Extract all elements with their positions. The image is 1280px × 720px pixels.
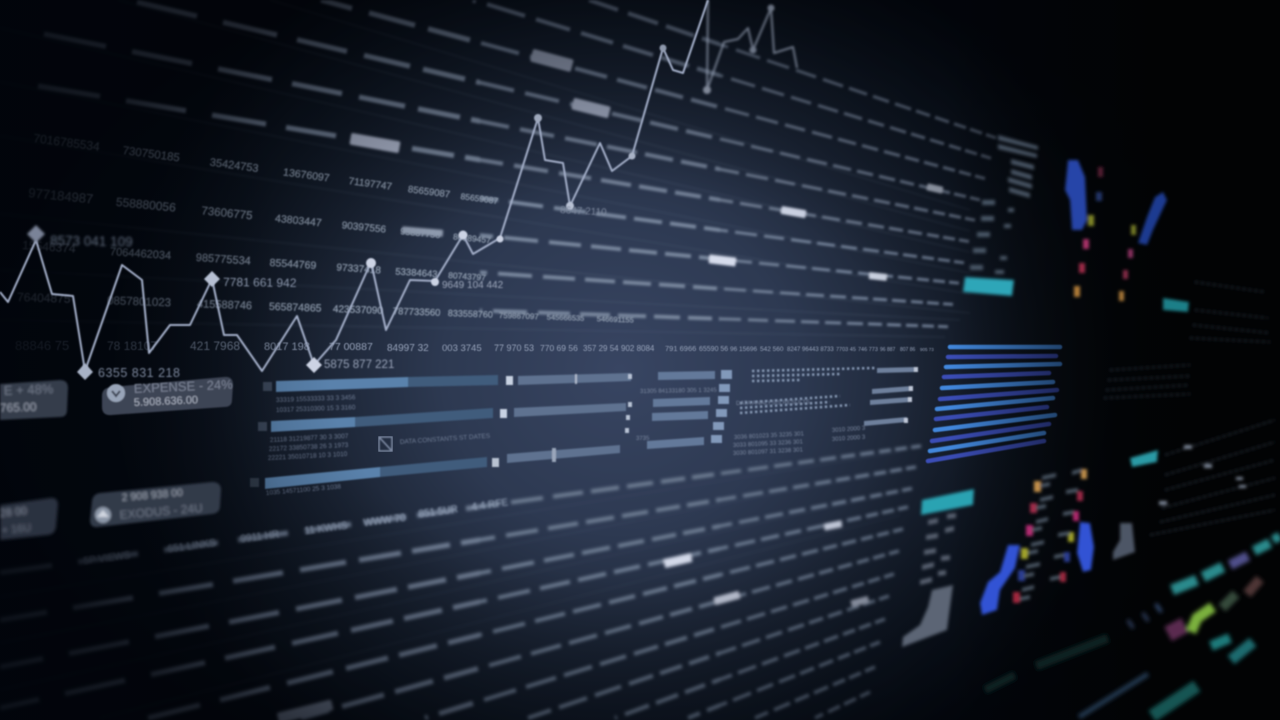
grid lines of lower table <box>0 452 900 718</box>
chart value labels: 6355 831 218 <box>98 366 180 380</box>
middle row of numeric values: 96 15696 <box>730 346 757 353</box>
chart value labels <box>50 205 607 380</box>
middle row of numeric values: 791 6966 <box>665 344 696 353</box>
right small indicator bars <box>864 367 918 426</box>
small text under progress bars: 22221 35010718 10 3 1010 <box>268 451 348 462</box>
data cells, lower rows right <box>718 228 966 330</box>
chart value labels: 8573 041 109 <box>50 233 133 249</box>
callout: lower left: + 16U <box>1 522 32 537</box>
row 977184987: 558880056 <box>115 195 177 215</box>
row 977184987: 977184987 <box>28 185 94 206</box>
small status text in middle panel: 3735 <box>636 436 650 442</box>
lower table header labels: 4 4 RFE <box>471 497 509 513</box>
icon: down chevron circle <box>107 384 125 402</box>
middle row of numeric values: 84997 32 <box>387 343 429 354</box>
row 76404875: 415588746 <box>197 298 252 312</box>
callout: exodus: EXODUS - 24U <box>119 501 203 522</box>
small status text in middle panel: 3010 2000 3 <box>832 426 866 434</box>
lower table header labels <box>83 497 509 567</box>
row 7016785534: 85659087 <box>407 184 451 201</box>
panel: upper data table <box>0 0 1005 337</box>
small text under progress bars <box>266 394 491 497</box>
middle row of numeric values: 421 7968 <box>190 339 240 353</box>
small status text in middle panel: 3030 801097 31 3238 301 <box>733 447 804 457</box>
small text under progress bars: 22172 33850738 26 3 1973 <box>269 442 349 453</box>
row 7064462034: 97337418 <box>336 262 382 276</box>
callout: income partially visible: 765.00 <box>0 400 37 415</box>
panel: blue horizontal bar chart <box>928 347 1060 461</box>
small text under progress bars: DATA CONSTANTS ST DATES <box>400 433 491 446</box>
icon: up arrow house <box>95 507 111 523</box>
callout: lower left <box>0 498 58 540</box>
data cells, lower rows centre <box>478 194 722 322</box>
small status text in middle panel: 3010 2000 3 <box>832 435 866 443</box>
colored blocks bottom right <box>985 536 1280 717</box>
data cells, right section <box>718 442 923 720</box>
progress bar group 3 with square chips <box>625 370 732 449</box>
metric rows above teal tag <box>970 200 1014 274</box>
teal tag <box>963 277 1014 296</box>
row 76404875: 0857801023 <box>107 295 171 309</box>
row 7016785534: 85659087 <box>460 191 499 206</box>
row 977184987: 86589457 <box>453 231 492 245</box>
callout: exodus <box>90 482 221 527</box>
icon: small grid square <box>379 437 392 451</box>
small status text in middle panel <box>636 388 866 457</box>
chart markers <box>27 44 666 380</box>
small status text in middle panel: 3033 801095 33 3236 301 <box>733 439 804 449</box>
middle row of numeric values: 357 29 54 <box>583 344 619 353</box>
row 7064462034: 53384643 <box>395 266 438 280</box>
row 7064462034: 7064462034 <box>110 246 171 262</box>
row 7016785534: 71197747 <box>348 176 393 193</box>
lower table header labels: 5P VIEWS <box>83 550 131 567</box>
row 76404875: 787733560 <box>393 306 441 319</box>
blue gauge right <box>1077 522 1094 572</box>
middle row of numeric values: 770 69 56 <box>540 343 578 353</box>
readable upper table numbers <box>17 131 634 326</box>
row 7016785534: 13676097 <box>282 166 330 185</box>
middle row of numeric values: 65590 56 <box>699 346 728 353</box>
data cells, left section <box>38 0 482 164</box>
row 7064462034: 15546374 <box>22 238 76 256</box>
progress bar group 2 <box>492 373 631 467</box>
row 76404875: 545666535 <box>547 313 584 323</box>
data cells, left section <box>0 502 482 720</box>
middle row of numeric values <box>15 338 934 354</box>
dotted indicator matrix <box>740 368 875 413</box>
panel: lower data table <box>0 446 921 720</box>
data cells, centre section <box>478 471 722 720</box>
row 76404875: 76404875 <box>17 290 71 306</box>
small text under progress bars: 21118 31219877 30 3 3007 <box>270 433 349 444</box>
data cells, centre section <box>478 0 722 204</box>
panel: progress bars and indicators <box>250 367 918 497</box>
panel: expense callouts <box>0 377 233 540</box>
chart value labels: 9649 104 442 <box>442 280 504 291</box>
lower table header labels: 11 KWHS <box>304 520 349 537</box>
metric rows under teal tag <box>920 513 956 585</box>
callout: income partially visible: E + 48% <box>4 381 54 398</box>
grey small stack <box>1113 523 1135 560</box>
lower table header labels: WWW 70 <box>363 513 407 529</box>
dark falloff to the left <box>0 0 280 720</box>
row 977184987: 95887756 <box>400 226 441 240</box>
progress bar group 1 <box>250 375 498 489</box>
panel: upper right dashboard <box>963 135 1270 398</box>
middle row of numeric values: 77 00887 <box>329 341 373 353</box>
highlighted cells <box>277 520 869 720</box>
row 7064462034: 85544769 <box>269 257 317 272</box>
dim rows far right <box>1104 282 1270 398</box>
middle row of numeric values: 902 8084 <box>621 344 655 353</box>
teal tag far right <box>1163 298 1189 312</box>
teal tag <box>921 489 974 515</box>
middle row of numeric values: 8247 964 <box>787 347 813 353</box>
row 7064462034: 985775534 <box>195 252 251 268</box>
small text under progress bars: 10317 25310300 15 3 3160 <box>276 404 356 414</box>
row 977184987: 43803447 <box>274 213 322 229</box>
chart value labels: 8647 2110 <box>560 205 607 218</box>
row 76404875: 423537090 <box>333 304 384 317</box>
row 977184987: 90397556 <box>341 220 387 236</box>
panel: lower right dashboard <box>902 420 1275 647</box>
middle row of numeric values: 542 560 <box>760 346 784 353</box>
status dots <box>1074 167 1136 301</box>
row 7016785534: 7016785534 <box>33 131 101 154</box>
small text under progress bars: 1035 14571100 25 3 1038 <box>266 483 342 497</box>
chart value labels: 7781 661 942 <box>223 275 297 290</box>
callout: expense: EXPENSE - 24% <box>133 377 233 396</box>
middle row of numeric values: 43 8733 <box>812 347 834 353</box>
middle row of numeric values: 8017 198 <box>264 341 310 353</box>
small text under progress bars: 33319 15533333 33 3 3456 <box>276 394 356 404</box>
grey stacked bars <box>902 585 953 647</box>
small status text in middle panel: 3036 801023 35 3235 301 <box>734 431 805 441</box>
row 76404875: 565874865 <box>269 301 322 315</box>
row 7016785534: 35424753 <box>209 157 259 175</box>
row 7016785534: 730750185 <box>122 145 180 164</box>
middle row of numeric values: 746 773 <box>858 347 878 353</box>
lower table header labels: 9911 HR <box>240 529 280 545</box>
lower table header labels: 851 5UR <box>418 504 459 520</box>
callout: expense <box>102 377 233 415</box>
blue gauge left <box>1065 160 1087 230</box>
row 76404875: 546691155 <box>597 314 634 325</box>
dark falloff to the right <box>950 0 1280 720</box>
middle row of numeric values: 78 18107 <box>107 339 157 353</box>
stacked summary lines <box>998 135 1038 198</box>
line chart: main series <box>0 0 708 380</box>
highlighted cells <box>349 49 943 281</box>
small status text in middle panel: 31305 84133180 305 1 3245 <box>640 388 717 395</box>
middle row of numeric values: 96 887 <box>880 347 896 353</box>
row 76404875: 833558760 <box>448 308 493 320</box>
callout: exodus: 2 908 938 00 <box>121 487 183 504</box>
row 76404875: 759867097 <box>499 311 540 321</box>
callout: expense: 5.908.636.00 <box>134 394 198 409</box>
middle row of numeric values: 77 970 53 <box>494 343 534 353</box>
small status text in middle panel: DATA ANALYSIS RESULTS <box>736 400 810 407</box>
data cells, right section <box>718 42 997 244</box>
line chart: far series <box>703 0 797 94</box>
middle row of numeric values: 905 73 <box>920 347 934 352</box>
blue gauge left <box>980 545 1020 615</box>
status dots <box>1013 469 1087 603</box>
grid lines of upper table <box>0 0 970 337</box>
callout: income partially visible <box>0 380 68 420</box>
row 7064462034: 80743797 <box>448 270 487 283</box>
middle row of numeric values: 7703 45 <box>836 347 856 353</box>
chart value labels: 5875 877 221 <box>324 359 394 371</box>
middle row of numeric values: 003 3745 <box>442 343 482 354</box>
middle row of numeric values: 88846 75 <box>15 338 69 353</box>
teal tag upper right <box>1130 450 1158 467</box>
middle row of numeric values: 807 86 <box>900 347 916 353</box>
lower table header labels: 651 LINKS <box>167 538 217 555</box>
row 977184987: 73606775 <box>201 205 253 222</box>
blue gauge right <box>1138 192 1167 245</box>
labels next to dots <box>1020 468 1082 601</box>
row lines and highlights right <box>1150 420 1275 535</box>
